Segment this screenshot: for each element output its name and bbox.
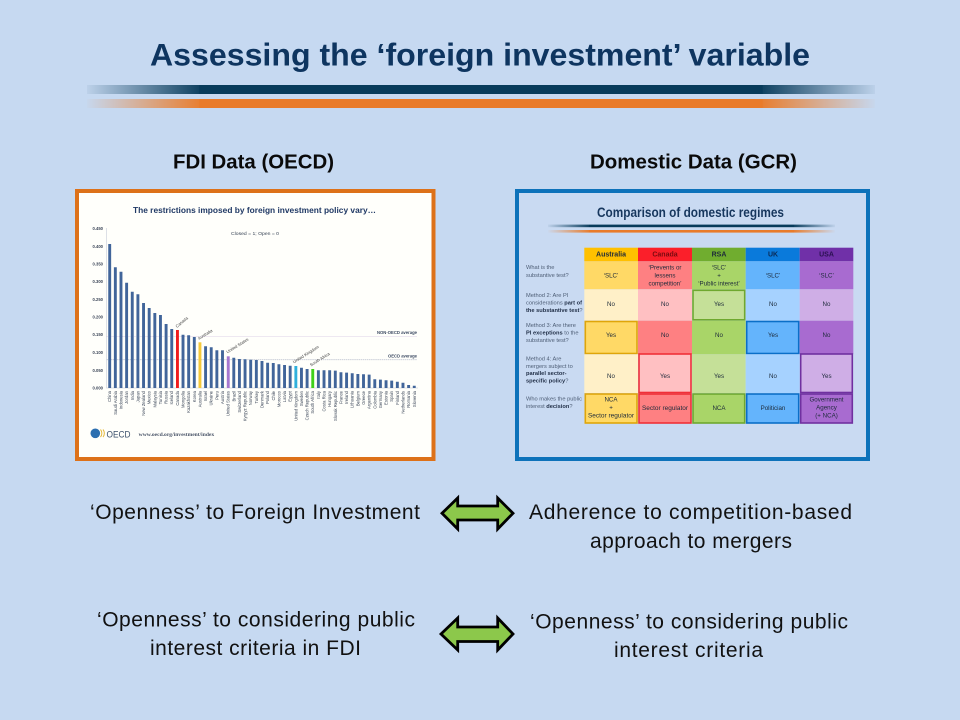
table row labels <box>526 265 583 410</box>
annotations above highlighted bars: Australia <box>197 328 214 341</box>
annotations above highlighted bars <box>174 315 331 367</box>
non-OECD average label: NON-OECD average <box>377 330 418 335</box>
table cell text: Agency <box>816 404 838 412</box>
panel frame <box>77 191 434 459</box>
y axis labels: 0.050 <box>93 368 104 373</box>
heading: domestic data: Domestic Data (GCR) <box>590 152 797 174</box>
country labels: Kazakhstan <box>186 390 191 413</box>
table cell text: Sector regulator <box>588 412 634 420</box>
country labels: Jordan <box>124 390 129 404</box>
table cell text: + <box>717 272 721 280</box>
country labels: Costa Rica <box>322 390 326 411</box>
country labels: Belgium <box>355 391 360 406</box>
y axis labels: 0.300 <box>93 279 104 284</box>
country labels <box>107 390 417 421</box>
table row labels: interest decision? <box>526 404 572 410</box>
country labels: Iceland <box>169 390 174 405</box>
country labels: Switzerland <box>237 390 242 413</box>
country labels: Greece <box>361 390 366 405</box>
country labels: Argentina <box>367 390 372 409</box>
annotations above highlighted bars: Canada <box>174 315 189 329</box>
country labels: Latvia <box>282 390 287 402</box>
country labels: Poland <box>265 390 270 404</box>
country labels: Indonesia <box>118 390 124 409</box>
table cell text: No <box>607 373 616 380</box>
icon: OECD logo globe <box>90 428 104 438</box>
country labels: Sweden <box>299 390 304 406</box>
table cell text: No <box>715 332 724 339</box>
table cell text: RSA <box>712 252 726 258</box>
heading: FDI data: FDI Data (OECD) <box>173 152 334 174</box>
country labels: Peru <box>214 390 219 400</box>
table row labels: specific policy? <box>526 378 568 384</box>
OECD average line <box>106 359 417 361</box>
highlighted bar: Australia <box>198 342 201 388</box>
annotations above highlighted bars: United Kingdom <box>292 344 320 364</box>
table cell text: Politician <box>761 405 786 412</box>
country labels: New Zealand <box>141 390 146 416</box>
country labels: Netherlands <box>400 391 406 414</box>
text: adherence to competition-based approach: Adherence to competition-based <box>529 501 852 524</box>
table cell text: + <box>609 404 613 412</box>
table row labels: Who makes the public <box>526 396 582 402</box>
table cell text: Yes <box>660 373 670 380</box>
country labels: Italy <box>316 390 321 399</box>
country labels: Ukraine <box>209 390 214 405</box>
text: openness to public interest criteria <box>530 610 848 662</box>
table cell text: No <box>661 301 670 308</box>
table cell text: ‘SLC’ <box>819 272 834 280</box>
country labels: Tunisia <box>158 390 163 404</box>
country labels: Spain <box>389 390 394 402</box>
table cell text: No <box>823 301 831 308</box>
table row labels: considerations part of <box>526 300 582 306</box>
column: Australia <box>584 248 638 423</box>
table row labels: Method 2: Are PI <box>526 293 569 299</box>
y axis labels: 0.150 <box>93 332 104 337</box>
country labels: Egypt <box>288 390 293 402</box>
country labels: Denmark <box>260 390 264 408</box>
text: adherence to competition-based approach: approach to mergers <box>590 530 792 553</box>
y axis labels: 0.250 <box>93 297 104 302</box>
panel: domestic data GCR table <box>517 191 868 459</box>
highlighted bar: United Kingdom <box>294 366 297 388</box>
table row labels: substantive test? <box>526 338 569 344</box>
table row labels: the substantive test? <box>526 308 583 314</box>
table cell text: No <box>823 332 831 339</box>
table cell text: USA <box>819 252 834 258</box>
OECD wordmark: OECD <box>106 430 131 440</box>
country labels: Israel <box>203 391 208 401</box>
y axis labels: 0.100 <box>93 350 104 355</box>
column: UK <box>746 248 800 423</box>
country labels: Malaysia <box>152 390 157 408</box>
country labels: Australia <box>197 390 202 407</box>
arrow: top double-headed <box>442 498 513 529</box>
y axis labels: 0.200 <box>93 314 104 320</box>
text: openness to public interest criteria in FDI: ‘Openness’ to considering public <box>97 608 415 632</box>
chart subtitle: Closed = 1; Open = 0 <box>231 231 279 237</box>
country labels: Ireland <box>344 390 349 404</box>
table cell text: NCA <box>712 405 726 412</box>
country labels: United States <box>226 391 231 416</box>
table row labels: Method 3: Are there <box>526 323 576 329</box>
country labels: Norway <box>248 390 253 405</box>
country labels: Kyrgyz Republic <box>243 391 248 421</box>
highlighted bar: Canada <box>176 330 179 388</box>
table cell text: Yes <box>821 373 832 380</box>
table cell text <box>588 252 844 420</box>
table cell text: Sector regulator <box>642 405 688 412</box>
column: RSA <box>692 248 746 423</box>
table row labels: substantive test? <box>526 273 569 279</box>
y axis labels: 0.350 <box>93 262 104 266</box>
highlighted bar: South Africa <box>311 369 314 388</box>
panel: FDI data OECD chart <box>77 191 434 459</box>
table title: Comparison of domestic regimes <box>597 205 784 220</box>
y axis labels <box>93 226 104 390</box>
table cell text: ‘SLC’ <box>766 272 780 280</box>
country labels: Lithuania <box>350 390 355 408</box>
axes <box>106 228 418 388</box>
table cell text: ‘SLC’ <box>712 264 726 272</box>
chart title: The restrictions imposed by foreign investment policy vary… <box>133 206 376 215</box>
table title underline bars <box>548 225 835 233</box>
table cell text: ‘Public interest’ <box>698 280 740 288</box>
table cell text: lessens <box>655 272 675 280</box>
country labels: India <box>130 390 135 400</box>
table row labels: mergers subject to <box>526 364 573 370</box>
table cell text: Canada <box>652 252 678 258</box>
country labels: Finland <box>395 390 400 405</box>
country labels: France <box>338 390 343 404</box>
panel frame <box>517 191 868 459</box>
table cell text: (+ NCA) <box>815 412 838 420</box>
OECD web address: www.oecd.org/investment/index <box>139 432 215 438</box>
arrow: bottom double-headed <box>441 618 513 650</box>
bars <box>110 244 414 388</box>
annotations above highlighted bars: South Africa <box>309 351 331 367</box>
title underline bars <box>87 85 875 108</box>
table cell text: Australia <box>596 252 626 258</box>
highlighted bar: United States <box>227 356 230 388</box>
table cell text: Yes <box>768 332 778 339</box>
country labels: Canada <box>175 390 180 406</box>
country labels: Turkey <box>254 390 259 404</box>
y axis labels: 0.400 <box>93 244 104 249</box>
country labels: China <box>107 390 112 402</box>
title: Assessing the ‘foreign investment’ variable <box>150 36 810 72</box>
country labels: Hungary <box>327 390 332 407</box>
table row labels: parallel sector- <box>526 371 567 377</box>
text: openness to public interest criteria: ‘Openness’ to considering public <box>530 610 848 634</box>
country labels: Mexico <box>147 390 152 404</box>
country labels: Mongolia <box>180 390 186 408</box>
country labels: Romania <box>406 390 411 408</box>
country labels: South Africa <box>310 390 315 414</box>
country labels: Estonia <box>384 390 389 405</box>
column: Canada <box>638 248 692 423</box>
country labels: Chile <box>271 390 276 401</box>
country labels: Japan <box>135 390 140 402</box>
table row labels: Method 4: Are <box>526 356 561 362</box>
country labels: Colombia <box>372 390 377 409</box>
country labels: Austria <box>220 390 225 404</box>
column: USA <box>800 248 853 423</box>
non-OECD average line <box>106 336 417 338</box>
table cell text: Government <box>809 396 844 404</box>
table cell text: competition’ <box>648 280 682 288</box>
text: openness to foreign investment: ‘Openness’ to Foreign Investment <box>90 501 420 524</box>
country labels: Russia <box>164 390 169 404</box>
country labels: Slovenia <box>412 390 417 407</box>
y axis labels: 0.000 <box>93 386 104 390</box>
text: openness to public interest criteria in FDI <box>97 608 415 660</box>
y axis labels: 0.450 <box>93 226 104 231</box>
table row labels: PI exceptions to the <box>526 330 578 336</box>
country labels: Saudi Arabia <box>113 390 118 415</box>
text: adherence to competition-based approach <box>529 501 852 553</box>
text: openness to public interest criteria: interest criteria <box>614 639 763 662</box>
OECD average label: OECD average <box>388 354 418 358</box>
country labels: Slovak Republic <box>333 391 338 421</box>
text: openness to public interest criteria in FDI: interest criteria in FDI <box>150 637 361 660</box>
country labels: Czech Republic <box>305 391 310 420</box>
table cell text: No <box>769 301 778 308</box>
table cell text: ‘Prevents or <box>648 264 682 272</box>
country labels: Korea <box>192 390 197 402</box>
table row labels: What is the <box>526 265 554 271</box>
table cell text: Yes <box>714 301 724 308</box>
annotations above highlighted bars: United States <box>225 337 249 354</box>
table cell text: NCA <box>604 396 618 404</box>
table cell text: No <box>769 373 778 380</box>
country labels: Brazil <box>231 391 236 401</box>
country labels: Morocco <box>276 390 281 407</box>
table cell text: Yes <box>606 332 616 339</box>
country labels: Germany <box>378 390 383 408</box>
table cell text: No <box>661 332 670 339</box>
table cell text: No <box>607 301 616 308</box>
country labels: United Kingdom <box>293 390 298 421</box>
table cell text: ‘SLC’ <box>604 272 618 280</box>
table cell text: UK <box>768 252 778 258</box>
table cell text: Yes <box>714 373 724 380</box>
